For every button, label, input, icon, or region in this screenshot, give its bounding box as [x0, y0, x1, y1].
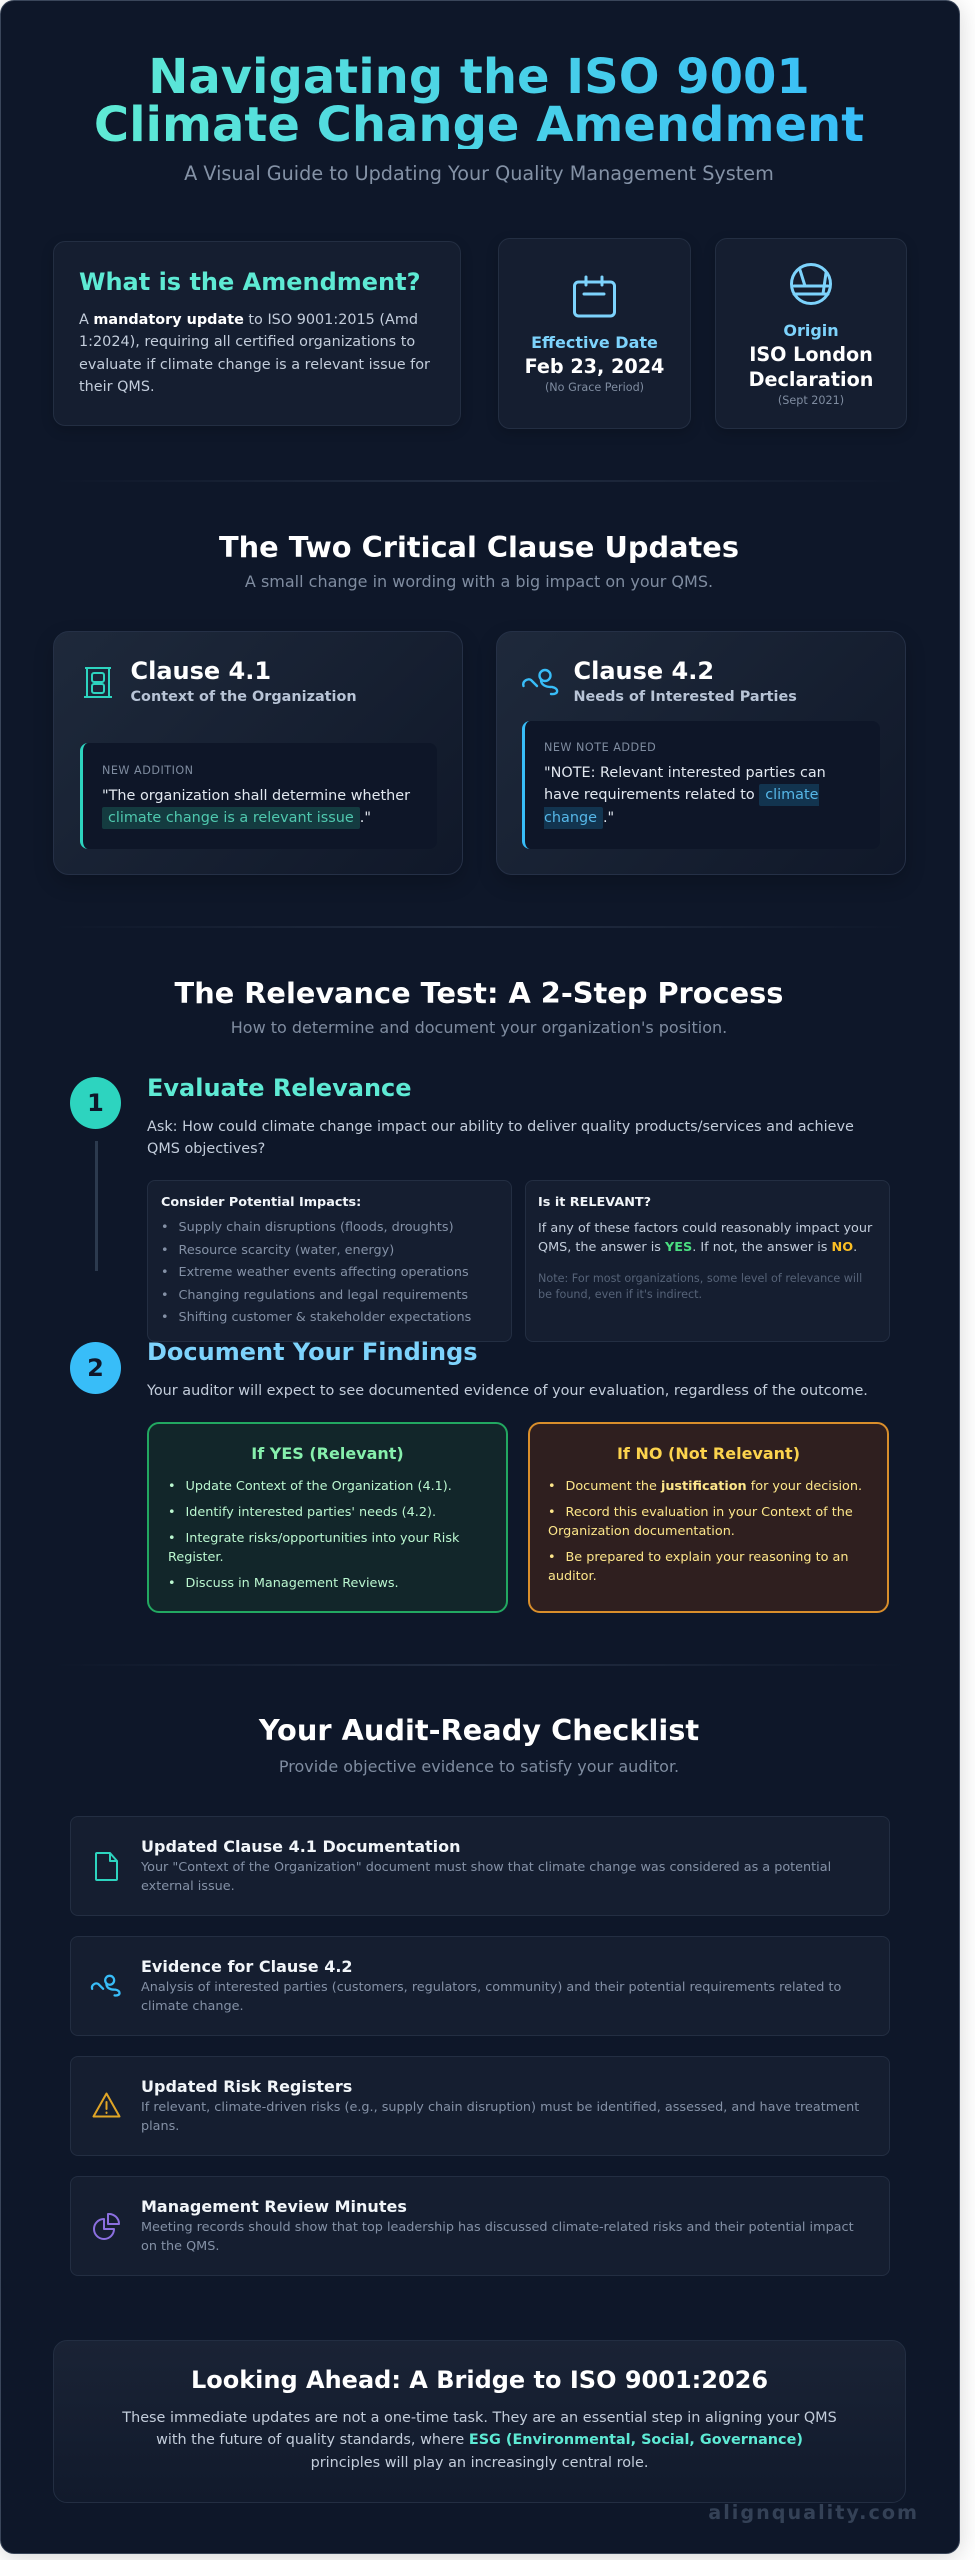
amendment description: evaluate if climate change is a relevant issue for: [79, 357, 430, 373]
looking ahead text: [122, 2410, 837, 2471]
checklist item: clause 4.2 evidence: [70, 1936, 890, 2036]
no actions list: Organization documentation.: [548, 1524, 735, 1539]
no actions list: Be prepared to explain your reasoning to an: [566, 1550, 848, 1565]
checklist item: risk registers: [70, 2056, 890, 2156]
yes actions list: Register.: [168, 1550, 224, 1565]
checklist title: management review: Management Review Minutes: [141, 2196, 407, 2216]
no actions list: Record this evaluation in your Context of the: [566, 1505, 853, 1520]
icon: globe: [790, 263, 832, 305]
heading: potential impacts: Consider Potential Impacts:: [161, 1195, 361, 1210]
checklist item: management review: [70, 2176, 890, 2276]
icon: pie chart: [93, 2213, 120, 2240]
checklist text: clause 4.1: external issue.: [141, 1879, 235, 1894]
impacts list: •: [161, 1243, 169, 1258]
label: effective date: Effective Date: [531, 332, 658, 352]
amendment description: A mandatory update to ISO 9001:2015 (Amd: [79, 312, 418, 328]
amendment description: their QMS.: [79, 379, 155, 395]
no actions list: •: [548, 1479, 556, 1494]
value: ISO London Declaration: [749, 343, 873, 391]
subheading: checklist: Provide objective evidence to satisfy your auditor.: [279, 1756, 679, 1776]
note: sept 2021: (Sept 2021): [778, 394, 844, 407]
yes actions list: •: [168, 1531, 176, 1546]
yes actions list: [168, 1479, 460, 1591]
impacts list: Extreme weather events affecting operations: [178, 1265, 469, 1280]
step 1 badge: 1: [87, 1089, 104, 1117]
looking ahead text: principles will play an increasingly central role.: [311, 2455, 648, 2471]
quote text: change .": [544, 810, 614, 826]
yes actions list: •: [168, 1505, 176, 1520]
checklist text: clause 4.2: Analysis of interested parties (customers, regulators, community) and their potential requirements related to: [141, 1980, 841, 1995]
yes actions list: Update Context of the Organization (4.1).: [186, 1479, 452, 1494]
label: origin: Origin: [783, 320, 839, 340]
subheading: clause updates: A small change in wording with a big impact on your QMS.: [245, 572, 713, 590]
impacts list: Changing regulations and legal requirements: [178, 1288, 468, 1303]
note: Note: For most organizations, some level of relevance will: [538, 1272, 862, 1285]
label: new note added: NEW NOTE ADDED: [544, 741, 656, 754]
yes actions list: Identify interested parties' needs (4.2).: [186, 1505, 436, 1520]
checklist text: clause 4.2: [141, 1980, 841, 2014]
subheading: needs: Needs of Interested Parties: [574, 689, 797, 705]
value: ISO London Declaration: Declaration: [749, 368, 873, 391]
looking ahead text: These immediate updates are not a one-time task. They are an essential step in aligning your QMS: [122, 2410, 837, 2426]
heading: looking ahead: Looking Ahead: A Bridge to ISO 9001:2026: [191, 2366, 768, 2394]
icon: calendar: [573, 276, 616, 318]
heading: if yes: If YES (Relevant): [251, 1444, 404, 1462]
panel: clause 4.2: [496, 631, 906, 875]
icon: interested parties: [522, 668, 558, 696]
relevance rule: QMS, the answer is YES. If not, the answer is NO.: [538, 1240, 857, 1255]
impacts list: •: [161, 1220, 169, 1235]
watermark: alignquality.com: [708, 2501, 919, 2524]
step 1 text: Ask: How could climate change impact our ability to deliver quality products/services and achieve: [147, 1119, 854, 1135]
panel: if no: [528, 1422, 889, 1613]
panel: if yes: [147, 1422, 508, 1613]
checklist text: management review: Meeting records should show that top leadership has discussed climate-related risks and their potential impact: [141, 2220, 854, 2235]
note: [538, 1272, 862, 1301]
quote text: [544, 765, 826, 829]
step 2 badge: 2: [87, 1354, 104, 1382]
looking ahead text: with the future of quality standards, where ESG (Environmental, Social, Governance): [156, 2432, 803, 2448]
yes actions list: Integrate risks/opportunities into your Risk: [186, 1531, 459, 1546]
impacts list: Resource scarcity (water, energy): [178, 1243, 394, 1258]
heading: what is the amendment: What is the Amendment?: [79, 268, 421, 296]
checklist text: risk: If relevant, climate-driven risks (e.g., supply chain disruption) must be identified, assessed, and have treatment: [141, 2100, 859, 2115]
amendment description: 1:2024), requiring all certified organizations to: [79, 334, 415, 350]
yes actions list: Discuss in Management Reviews.: [186, 1576, 399, 1591]
no actions list: auditor.: [548, 1569, 597, 1584]
yes actions list: •: [168, 1576, 176, 1591]
note: be found, even if it's indirect.: [538, 1288, 702, 1301]
panel: looking ahead: [53, 2340, 906, 2503]
icon: warning: [92, 2092, 120, 2118]
quote text: "NOTE: Relevant interested parties can: [544, 765, 826, 781]
icon: building: [84, 667, 112, 698]
step 1 text: QMS objectives?: [147, 1141, 265, 1157]
checklist text: management review: [141, 2220, 854, 2254]
quote text: climate change is a relevant issue .": [108, 810, 371, 826]
checklist text: clause 4.1: Your "Context of the Organization" document must show that climate change was considered as a potential: [141, 1860, 831, 1875]
step 2 text: Your auditor will expect to see documented evidence of your evaluation, regardless of the outcome.: [147, 1383, 868, 1399]
step 1 badge: [70, 1077, 121, 1129]
panel: effective date: [498, 238, 691, 429]
panel: potential impacts: [147, 1180, 512, 1342]
callout: new addition: [80, 743, 437, 849]
heading: two critical clause updates: The Two Critical Clause Updates: [219, 530, 739, 564]
heading: clause 4.2: Clause 4.2: [574, 657, 714, 685]
impacts list: Shifting customer & stakeholder expectations: [178, 1310, 471, 1325]
impacts list: •: [161, 1310, 169, 1325]
step 2 heading: Document Your Findings: [147, 1338, 478, 1366]
impacts list: [161, 1220, 471, 1325]
heading: checklist: Your Audit-Ready Checklist: [259, 1713, 699, 1747]
note: no grace period: (No Grace Period): [545, 381, 644, 394]
amendment description: [79, 312, 430, 395]
checklist item: clause 4.1 documentation: [70, 1816, 890, 1916]
panel: clause 4.1: [53, 631, 463, 875]
step 1 heading: Evaluate Relevance: [147, 1074, 412, 1102]
value: date: Feb 23, 2024: [525, 355, 664, 378]
step 2 badge: [70, 1342, 121, 1394]
subheading: relevance test: How to determine and document your organization's position.: [231, 1018, 727, 1036]
impacts list: •: [161, 1288, 169, 1303]
value: ISO London Declaration: ISO London: [749, 343, 873, 366]
impacts list: Supply chain disruptions (floods, droughts): [178, 1220, 454, 1235]
subtitle: A Visual Guide to Updating Your Quality Management System: [184, 162, 774, 185]
checklist text: clause 4.1: [141, 1860, 831, 1894]
panel: is it relevant: [525, 1180, 890, 1342]
checklist text: risk: [141, 2100, 859, 2134]
title: Climate Change Amendment: [94, 97, 864, 153]
callout: new note added: [522, 721, 880, 849]
no actions list: [548, 1479, 862, 1584]
panel: origin: [715, 238, 907, 429]
yes actions list: •: [168, 1479, 176, 1494]
no actions list: Document the justification for your decision.: [566, 1479, 862, 1494]
icon: interested parties: [90, 1974, 121, 1997]
heading: if no: If NO (Not Relevant): [617, 1444, 800, 1462]
checklist text: clause 4.2: climate change.: [141, 1999, 244, 2014]
impacts list: •: [161, 1265, 169, 1280]
subheading: context: Context of the Organization: [130, 689, 357, 705]
checklist title: risk: Updated Risk Registers: [141, 2076, 352, 2096]
no actions list: •: [548, 1505, 556, 1520]
quote text: have requirements related to climate: [544, 787, 818, 803]
quote text: "The organization shall determine whether: [102, 788, 410, 804]
relevance rule: [538, 1221, 872, 1255]
checklist text: risk: plans.: [141, 2119, 179, 2134]
checklist text: management review: on the QMS.: [141, 2239, 219, 2254]
label: new addition: NEW ADDITION: [102, 764, 194, 777]
panel: what is the amendment: [53, 241, 461, 426]
checklist title: clause 4.2: Evidence for Clause 4.2: [141, 1956, 353, 1976]
icon: document: [95, 1852, 118, 1881]
no actions list: •: [548, 1550, 556, 1565]
relevance rule: If any of these factors could reasonably impact your: [538, 1221, 872, 1236]
step connector line: [95, 1141, 98, 1271]
heading: is it relevant: Is it RELEVANT?: [538, 1195, 651, 1210]
heading: clause 4.1: Clause 4.1: [130, 657, 271, 685]
title: [94, 49, 864, 153]
quote text: [102, 788, 410, 829]
heading: relevance test: The Relevance Test: A 2-Step Process: [175, 976, 783, 1010]
title: Navigating the ISO 9001: [148, 49, 810, 105]
checklist title: clause 4.1: Updated Clause 4.1 Documentation: [141, 1836, 461, 1856]
step 1 text: [147, 1119, 854, 1157]
